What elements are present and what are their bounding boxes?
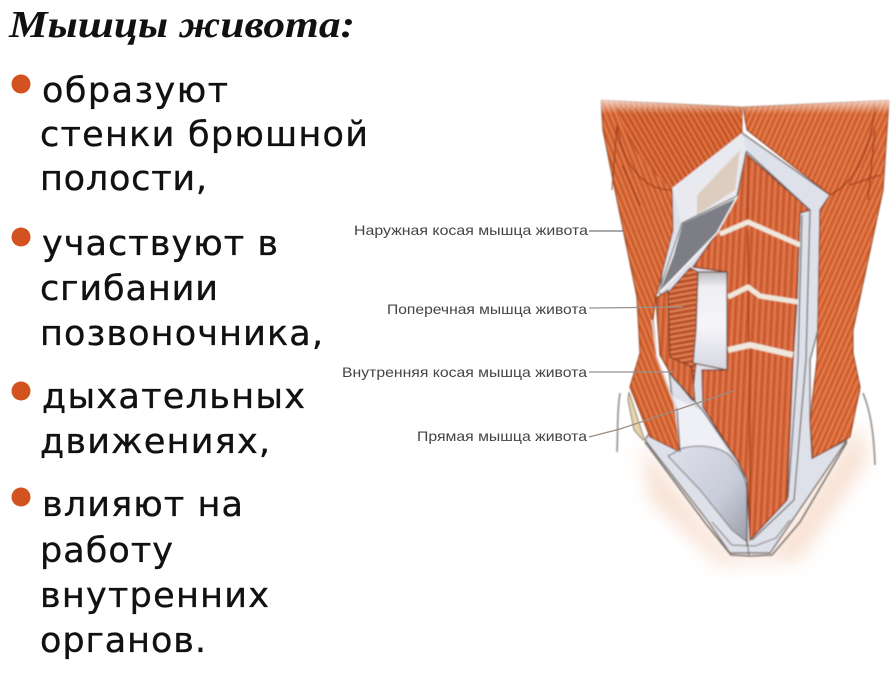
right sheath lines [746,151,810,540]
label: rectus: Прямая мышца живота [417,428,587,444]
bullet item: breathing: дыхательных [42,377,305,417]
abdominal muscle illustration [595,94,891,565]
bullet list [12,71,368,661]
white rim of flap side [652,320,676,408]
muscle: left chest [617,107,742,188]
bullet item: organs: влияют на [42,485,243,525]
hip tabs [628,390,860,440]
fold edge line [657,357,747,545]
bullet item: organs: работу [40,531,173,571]
bullet item: walls [12,71,368,199]
bullet item: breathing [12,377,305,462]
brown patch on fascia [697,150,740,215]
title: Мышцы живота: [8,4,355,46]
fade at top of torso [595,94,891,114]
chest dark vessels [612,105,880,205]
side outlines [617,393,875,465]
bullet item: spine: позвоночника, [40,314,323,354]
label: transverse: Поперечная мышца живота [387,301,587,317]
anatomical labels [342,222,733,444]
transverse muscle [662,268,698,400]
label: rectus [417,391,733,444]
bullet item: spine [12,224,323,354]
internal oblique strip [656,290,695,401]
label: internal oblique: Внутренняя косая мышца живота [342,364,587,380]
lower gray fascia [668,446,747,542]
lower left fascia [673,397,728,452]
bullet item: spine: участвуют в [42,224,278,264]
bullet item: organs: внутренних [40,576,269,616]
bullet item: organs: органов. [40,621,206,661]
bullet item: spine: сгибании [40,269,218,309]
rectus midline [748,155,750,535]
bullet item: breathing: движениях, [40,422,270,462]
flap edge [658,152,746,294]
bullet item: walls: полости, [40,159,207,199]
white fascia window [693,272,727,370]
fascia base [645,133,847,553]
upper left fascia [672,133,746,223]
muscle: left external oblique [601,100,742,452]
bullet item: organs [12,485,269,661]
bullet item: walls: стенки брюшной [40,115,368,155]
lower outer contour [645,442,847,556]
skin shading [640,420,868,565]
tendinous intersections [720,222,800,355]
folded flap [658,197,737,294]
bullet item: walls: образуют [42,71,228,111]
label: external oblique: Наружная косая мышца живота [354,222,588,238]
muscle: rectus abdominis [693,153,810,540]
muscle: right external oblique [743,100,889,458]
